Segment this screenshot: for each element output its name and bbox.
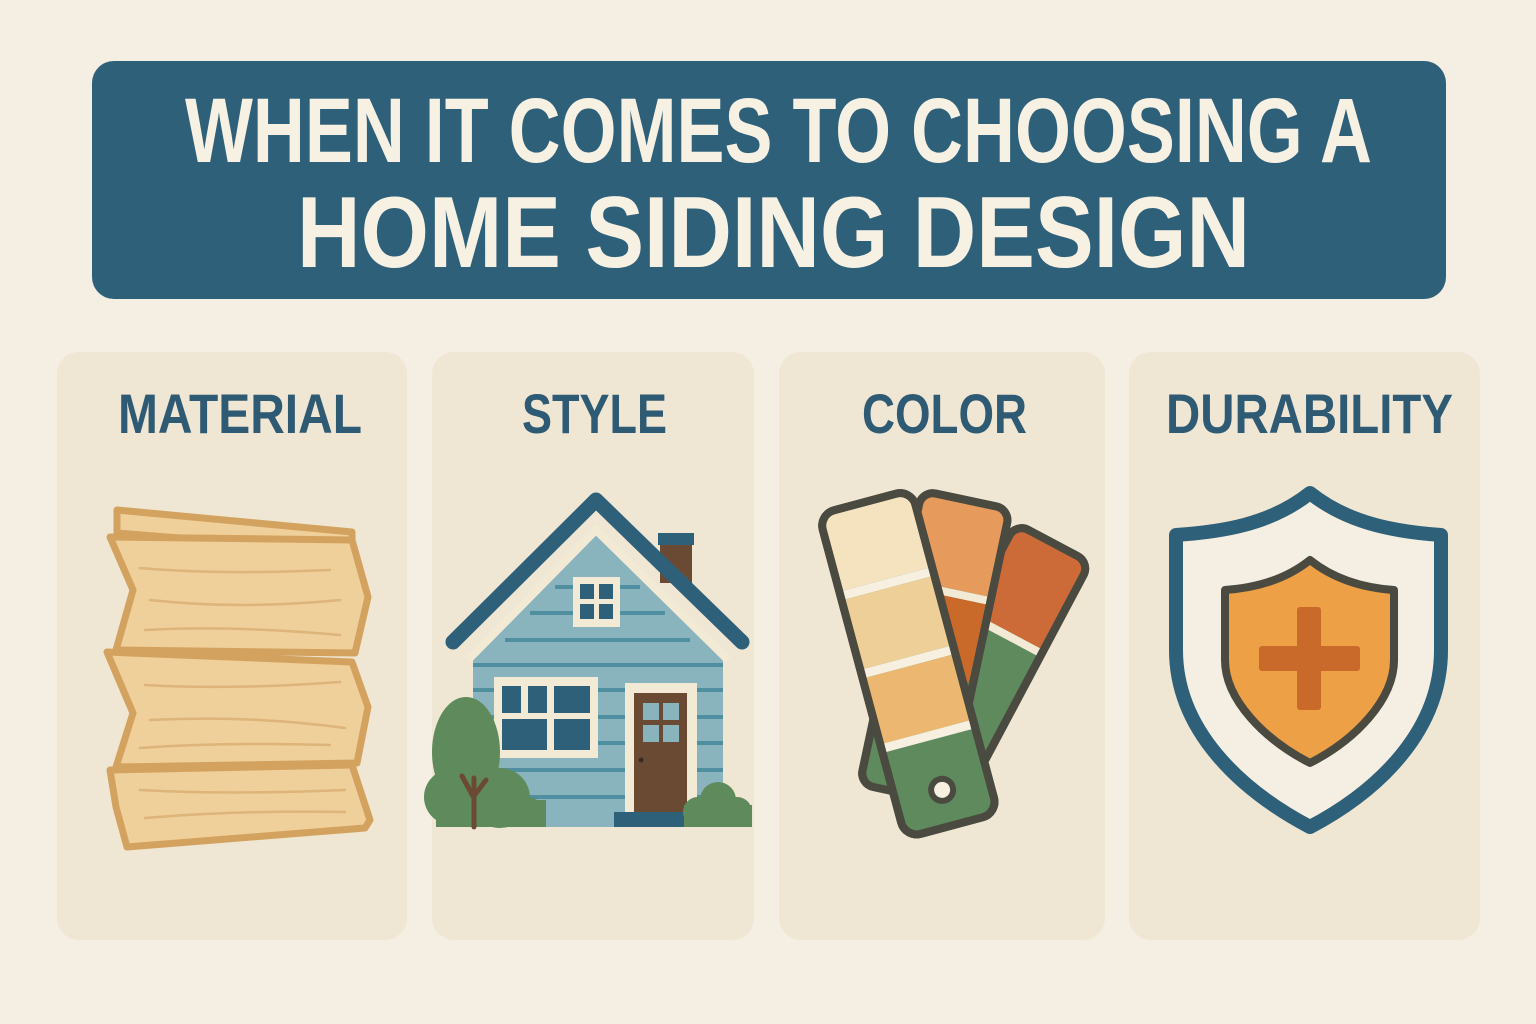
icon: house bbox=[424, 500, 752, 828]
heading: color: COLOR bbox=[862, 382, 1027, 445]
title text: HOME SIDING DESIGN bbox=[297, 177, 1250, 289]
panel: durability bbox=[1129, 352, 1480, 940]
icon: color swatches bbox=[819, 490, 1090, 838]
title text bbox=[185, 80, 1372, 289]
heading: style: STYLE bbox=[522, 382, 667, 445]
icon: shield bbox=[1176, 493, 1441, 827]
panel: color bbox=[779, 352, 1105, 940]
panel: style bbox=[424, 352, 754, 940]
heading: material: MATERIAL bbox=[118, 382, 362, 445]
title banner bbox=[92, 61, 1446, 299]
panel: material bbox=[57, 352, 407, 940]
heading: durability: DURABILITY bbox=[1166, 382, 1453, 445]
icon: wood planks bbox=[107, 510, 370, 847]
